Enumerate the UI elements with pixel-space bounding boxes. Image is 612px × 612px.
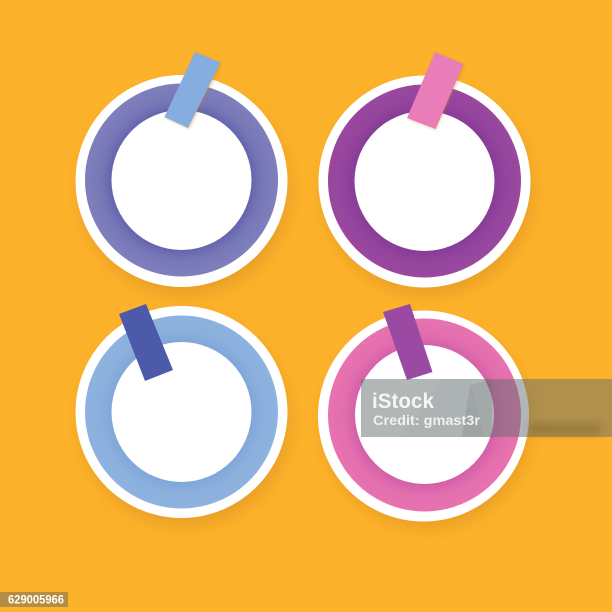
badge: bottom-left light blue ring <box>76 304 290 526</box>
badge: top-left purple-blue ring <box>76 52 290 295</box>
watermark credit text: Credit: gmast3r <box>373 413 481 428</box>
watermark logo text: iStock <box>372 390 434 413</box>
image id badge <box>0 592 68 607</box>
image id badge: 629005966 <box>8 594 64 606</box>
watermark band <box>361 379 612 437</box>
badge: bottom-right pink ring <box>318 304 531 528</box>
badge: top-right purple ring <box>318 52 533 295</box>
